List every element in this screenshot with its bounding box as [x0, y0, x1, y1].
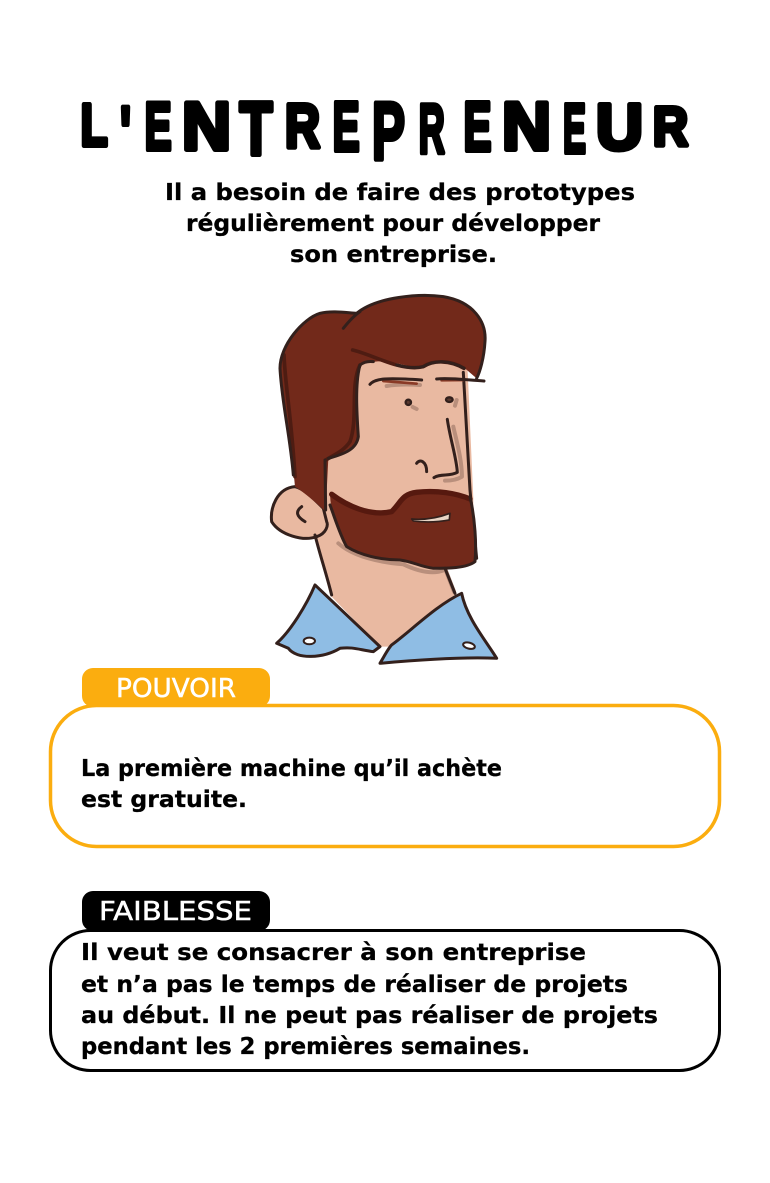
- title: R: [285, 92, 320, 162]
- pouvoir text: [81, 756, 502, 813]
- title: E: [563, 90, 586, 168]
- title: ': [120, 92, 131, 170]
- title: T: [240, 86, 272, 170]
- title: U: [596, 90, 643, 164]
- faiblesse text: pendant les 2 premières semaines.: [81, 1034, 530, 1060]
- title: L: [81, 92, 108, 158]
- intro text: son entreprise.: [290, 242, 497, 268]
- title: N: [502, 88, 551, 164]
- title: E: [464, 88, 492, 166]
- faiblesse text: au début. Il ne peut pas réaliser de projets: [81, 1003, 658, 1029]
- intro text: Il a besoin de faire des prototypes: [165, 180, 635, 206]
- panel: pouvoir: [50, 668, 720, 846]
- faiblesse text: [81, 940, 658, 1060]
- panel: faiblesse: [50, 891, 720, 1070]
- pouvoir text: La première machine qu’il achète: [81, 756, 502, 782]
- intro text: régulièrement pour développer: [186, 211, 601, 237]
- title: N: [182, 88, 231, 164]
- pouvoir text: est gratuite.: [81, 787, 247, 813]
- title: R: [419, 90, 445, 168]
- tab: faiblesse: FAIBLESSE: [99, 897, 252, 927]
- intro text: [165, 180, 635, 268]
- title: [81, 86, 688, 178]
- tab: pouvoir: POUVOIR: [116, 674, 236, 704]
- tab: faiblesse: [82, 891, 270, 931]
- tab: pouvoir: [82, 668, 270, 707]
- title: E: [145, 88, 172, 164]
- title: P: [372, 86, 405, 178]
- faiblesse text: Il veut se consacrer à son entreprise: [81, 940, 586, 966]
- illustration: bearded man: [271, 296, 497, 663]
- faiblesse text: et n’a pas le temps de réaliser de projets: [81, 972, 628, 998]
- title: E: [333, 88, 360, 166]
- title: R: [653, 96, 688, 158]
